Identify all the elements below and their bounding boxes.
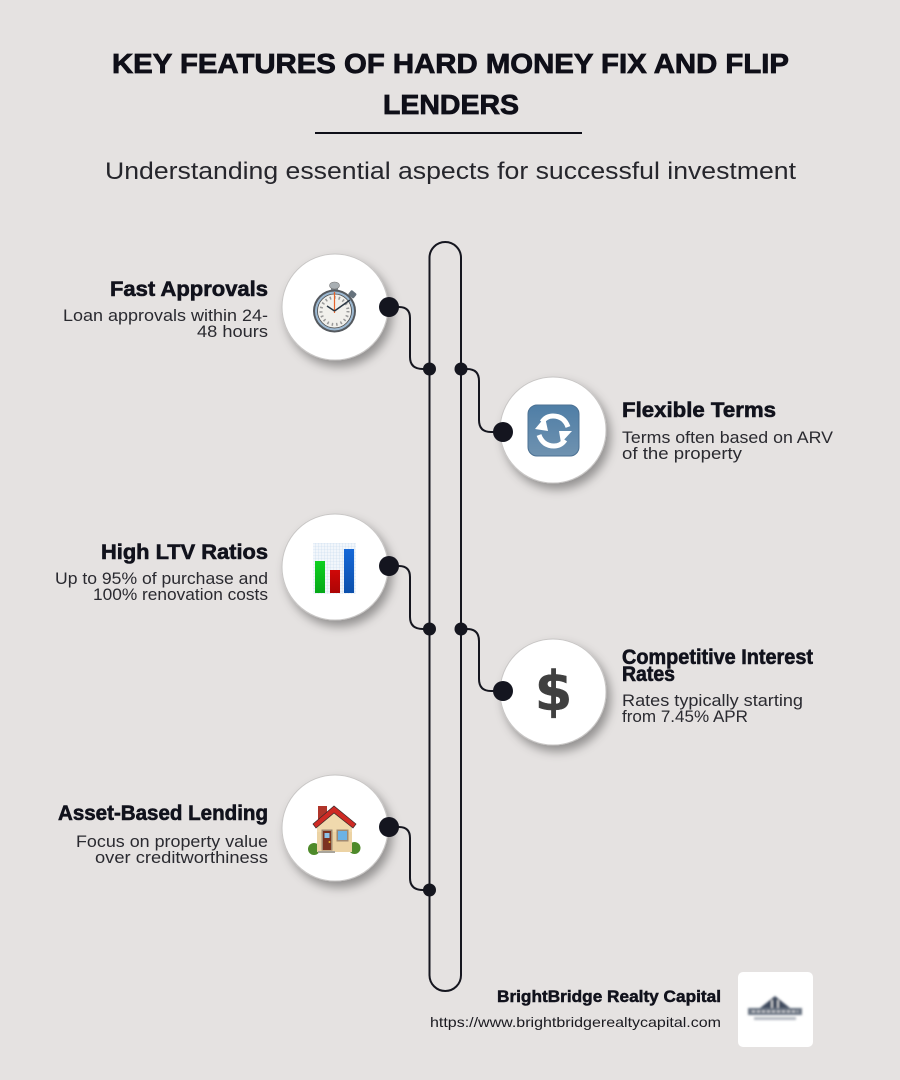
heading: Asset-Based Lending [58, 802, 268, 825]
heading: Fast Approvals [110, 278, 268, 301]
timeline spine and connectors [389, 242, 503, 991]
title [112, 48, 789, 120]
icon: sync arrows [528, 405, 579, 456]
icon: dollar sign: $ [535, 660, 572, 723]
description [76, 833, 268, 867]
description: of the property [622, 445, 743, 463]
description [622, 429, 833, 463]
timeline junction dots [423, 362, 468, 896]
heading [622, 646, 813, 686]
heading: Rates [622, 663, 675, 686]
description: Focus on property value [76, 833, 268, 851]
footer: company name and url [430, 987, 721, 1030]
heading: Flexible Terms [622, 399, 776, 422]
feature: competitive interest rates [493, 639, 813, 745]
description [622, 692, 803, 726]
icon: bar chart [313, 543, 356, 594]
description: 100% renovation costs [93, 586, 268, 604]
footer: logo [738, 972, 813, 1047]
title: KEY FEATURES OF HARD MONEY FIX AND FLIP [112, 48, 789, 79]
title: LENDERS [383, 89, 519, 120]
footer: company name and url: https://www.brightbridgerealtycapital.com [430, 1014, 721, 1030]
description: Loan approvals within 24- [63, 307, 268, 325]
feature: asset-based lending [58, 775, 399, 881]
footer: company name and url: BrightBridge Realty Capital [497, 987, 721, 1006]
subtitle: Understanding essential aspects for successful investment [105, 158, 796, 185]
feature: flexible terms [493, 377, 833, 483]
description: 48 hours [197, 323, 268, 341]
description: over creditworthiness [95, 849, 268, 867]
description [55, 570, 268, 604]
description [63, 307, 268, 341]
icon: house [308, 806, 360, 855]
feature: high ltv ratios [55, 514, 399, 620]
description: Rates typically starting [622, 692, 803, 710]
description: Terms often based on ARV [622, 429, 833, 447]
description: Up to 95% of purchase and [55, 570, 268, 588]
feature: fast approvals [63, 254, 399, 360]
heading: High LTV Ratios [101, 541, 268, 564]
description: from 7.45% APR [622, 708, 748, 726]
icon: stopwatch [313, 282, 357, 332]
heading: Competitive Interest [622, 646, 813, 669]
